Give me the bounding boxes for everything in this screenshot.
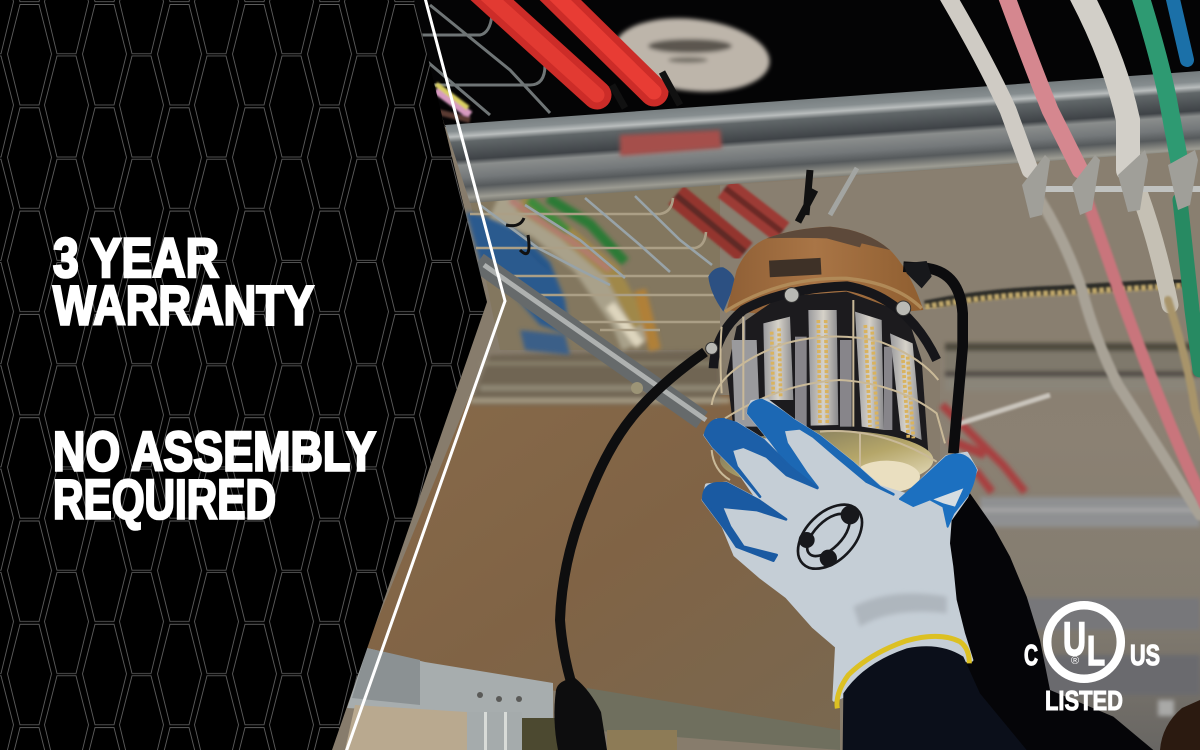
LED panel 2 xyxy=(808,310,838,426)
diagonal tray wires xyxy=(480,196,712,285)
blue tip finger two xyxy=(705,419,817,497)
heading: no assembly required xyxy=(53,420,376,530)
rear dark sleeve xyxy=(887,493,1153,750)
ceiling dark xyxy=(410,0,1200,127)
white chevron line xyxy=(346,0,505,750)
yellow cuff xyxy=(837,636,969,708)
cord connector xyxy=(903,261,932,288)
dome dark band xyxy=(767,227,890,250)
LED panel 1 xyxy=(763,317,793,400)
small cables top-left xyxy=(436,84,470,120)
metal strut channel xyxy=(445,71,1200,203)
hair at lower right xyxy=(1160,700,1200,750)
heading: 3 year warranty: 3 YEAR xyxy=(53,226,219,289)
red pipes xyxy=(470,0,654,95)
smoke detector xyxy=(611,11,773,99)
red reflection in strut xyxy=(620,130,722,156)
UL letter U: U xyxy=(1063,612,1086,665)
heading: 3 year warranty: WARRANTY xyxy=(53,274,314,336)
black hexagon panel xyxy=(0,0,487,750)
black power cord left xyxy=(560,352,705,682)
dome label xyxy=(769,258,821,277)
bottom dish xyxy=(720,430,933,490)
lower beam across mesh xyxy=(470,350,730,405)
work light lamp xyxy=(706,227,963,493)
heading: no assembly required: NO ASSEMBLY xyxy=(53,420,376,482)
LED panel 4 xyxy=(890,333,922,440)
corrugated panel xyxy=(467,712,522,750)
lamp inner body xyxy=(727,292,928,453)
c label: C xyxy=(1024,640,1038,672)
diagonal grey conduit xyxy=(478,262,706,420)
icon: UL listed mark xyxy=(1024,605,1160,716)
us label: US xyxy=(1130,640,1160,672)
blurred red pipes right xyxy=(942,405,1025,492)
flexible gold highlight xyxy=(925,285,1190,307)
conduit lower parts xyxy=(1040,195,1200,515)
glove shading xyxy=(853,593,947,627)
hexagon pattern xyxy=(0,0,487,750)
white thumb stitching xyxy=(933,488,963,507)
power cord right xyxy=(903,267,963,453)
red pipes behind lamp xyxy=(676,188,782,252)
listed label: LISTED xyxy=(1045,685,1123,716)
brown wall left of hand xyxy=(365,395,840,735)
registered mark: ® xyxy=(1071,655,1079,667)
printed logo on glove xyxy=(786,493,874,581)
LED panel far left xyxy=(732,340,760,427)
copper dome xyxy=(727,227,923,320)
screw heads xyxy=(706,288,911,354)
LED diode rows xyxy=(772,320,913,438)
wall base xyxy=(330,0,1200,750)
knit glove body xyxy=(703,400,976,700)
patch right of plug xyxy=(607,730,677,750)
blue finger behind lamp xyxy=(708,267,735,312)
blue tip finger three xyxy=(703,483,786,561)
conduits upper parts xyxy=(947,0,1187,170)
black tie in blue bundle xyxy=(506,218,529,254)
blurred lower beams right xyxy=(945,343,1200,716)
mesh tray background xyxy=(470,185,720,350)
blue tip finger one xyxy=(748,400,893,494)
inner silver strips xyxy=(742,317,892,430)
LED panel 3 xyxy=(855,312,884,430)
hook xyxy=(798,168,857,222)
UL ring xyxy=(1047,605,1121,679)
blue thumb xyxy=(900,454,976,527)
wall below beam xyxy=(345,705,467,750)
gloved hand xyxy=(703,400,1153,750)
grey wall right of hand xyxy=(940,190,1200,750)
bottom metal beam xyxy=(347,648,840,750)
ceiling rods xyxy=(816,0,822,95)
mesh cables: multi-colour bundle xyxy=(495,198,655,350)
UL letter L: L xyxy=(1087,627,1105,674)
mesh tray wires xyxy=(470,198,720,330)
flexible gold conduit xyxy=(925,282,1190,305)
brass rim xyxy=(725,278,922,312)
conduit clamps and rod xyxy=(1022,150,1200,218)
heading: 3 year warranty xyxy=(53,226,314,336)
panel fill xyxy=(0,0,487,750)
plug xyxy=(554,678,607,750)
black ring xyxy=(713,286,937,368)
cage wires xyxy=(712,300,945,480)
dark area below beam xyxy=(522,718,562,750)
heading: no assembly required: REQUIRED xyxy=(53,468,276,530)
photo: construction ceiling scene xyxy=(330,0,1200,750)
light wire xyxy=(955,395,1050,425)
mesh cables: blue bundle xyxy=(466,212,570,355)
pipe clamp xyxy=(612,72,680,108)
wall under strut xyxy=(600,150,1200,360)
top mesh wires xyxy=(420,5,550,115)
dish bright centre xyxy=(853,461,920,493)
front sleeve xyxy=(843,646,1027,750)
